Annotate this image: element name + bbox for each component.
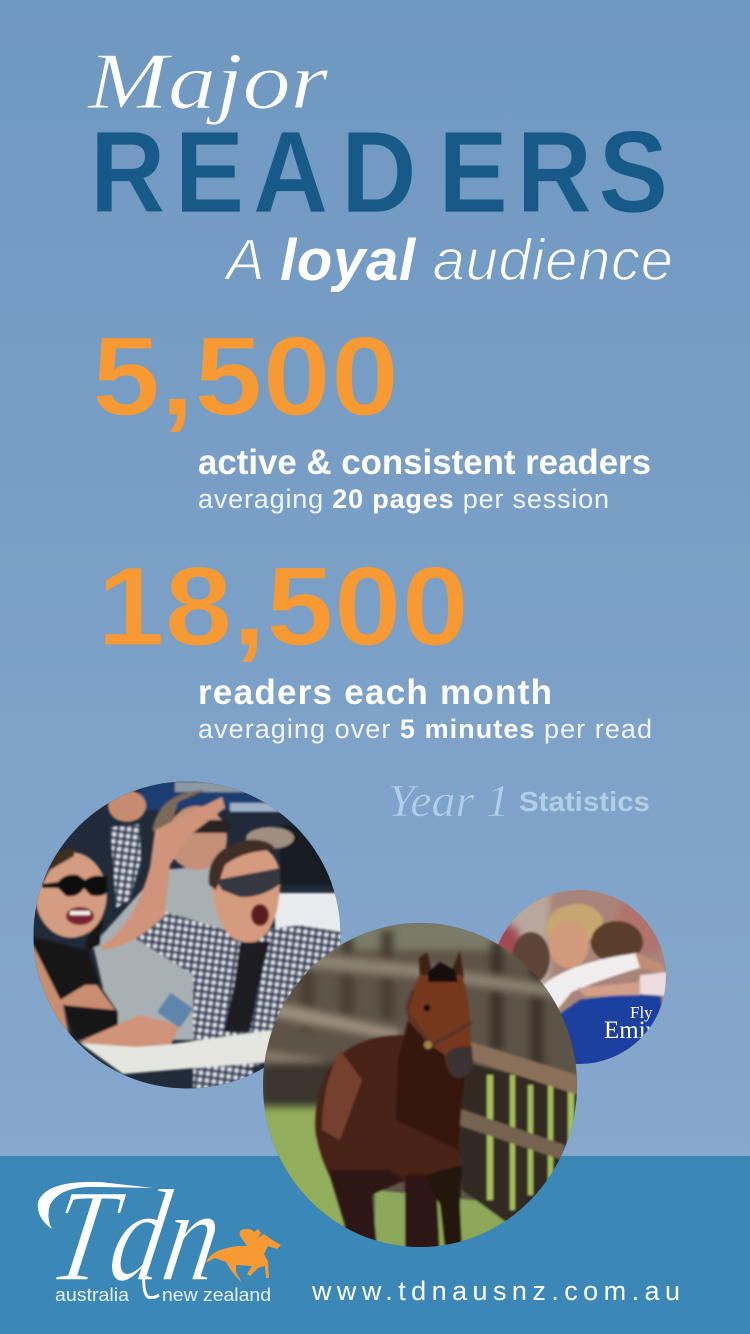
horse head (408, 975, 473, 1078)
photo: embracing couple (498, 890, 666, 1064)
horse body (315, 1035, 460, 1185)
woman (33, 917, 118, 1040)
man checked shirt (133, 910, 342, 1085)
horse front legs (405, 1175, 440, 1255)
title (87, 38, 673, 293)
blue shirt (542, 984, 662, 1064)
man head (591, 921, 643, 963)
photo: embracing couple: Fly (630, 1003, 653, 1022)
stat: 18,500 readers (97, 544, 652, 744)
tie (224, 941, 270, 1032)
rail (80, 1030, 272, 1074)
photo: cheering racegoers (30, 780, 345, 1092)
raised arm (100, 797, 225, 950)
hand with phone (76, 1014, 180, 1048)
horse hind legs (328, 1170, 404, 1241)
white sleeve (542, 951, 642, 1010)
script word: Major: Major (87, 38, 329, 126)
blonde hair (547, 904, 603, 945)
subtitle: A loyal audience: A loyal audience (223, 228, 673, 293)
checked sleeve of older man (110, 824, 141, 908)
man head (212, 845, 280, 942)
website url: www.tdnausnz.com.au (311, 1276, 680, 1306)
logo: Tdn australia new zealand (38, 1162, 281, 1309)
stat headline: readers each month (198, 673, 552, 712)
stat detail: averaging 20 pages per session (198, 484, 609, 514)
horse neck (396, 1020, 465, 1150)
script: Year 1: Year 1 (388, 775, 510, 826)
older man (93, 865, 235, 1040)
logo tagline: new zealand (162, 1285, 271, 1305)
logo: d tail (144, 1255, 159, 1298)
dark hair left (512, 932, 550, 984)
stat headline: active & consistent readers (198, 443, 651, 482)
heading: READERS: READERS (90, 108, 668, 237)
stat: 5,500 readers (92, 314, 651, 514)
number: 5,500: 5,500 (92, 314, 399, 439)
halter (407, 990, 472, 1046)
number: 18,500: 18,500 (97, 544, 469, 669)
stat detail: averaging over 5 minutes per read (198, 714, 652, 744)
caption: Year 1 Statistics (388, 775, 650, 826)
logo tagline: australia (55, 1285, 130, 1305)
footer band (0, 1156, 750, 1334)
logo wordmark: Tdn (41, 1162, 233, 1309)
horse ears (419, 951, 464, 980)
logo swash on T (38, 1182, 153, 1229)
logo: jockey and horse icon (205, 1229, 281, 1283)
photo: bay horse by fence (258, 920, 580, 1258)
label: Statistics: Statistics (519, 786, 650, 817)
shirt sponsor lettering: Emirates (604, 1017, 693, 1044)
logo tagline (55, 1285, 271, 1305)
